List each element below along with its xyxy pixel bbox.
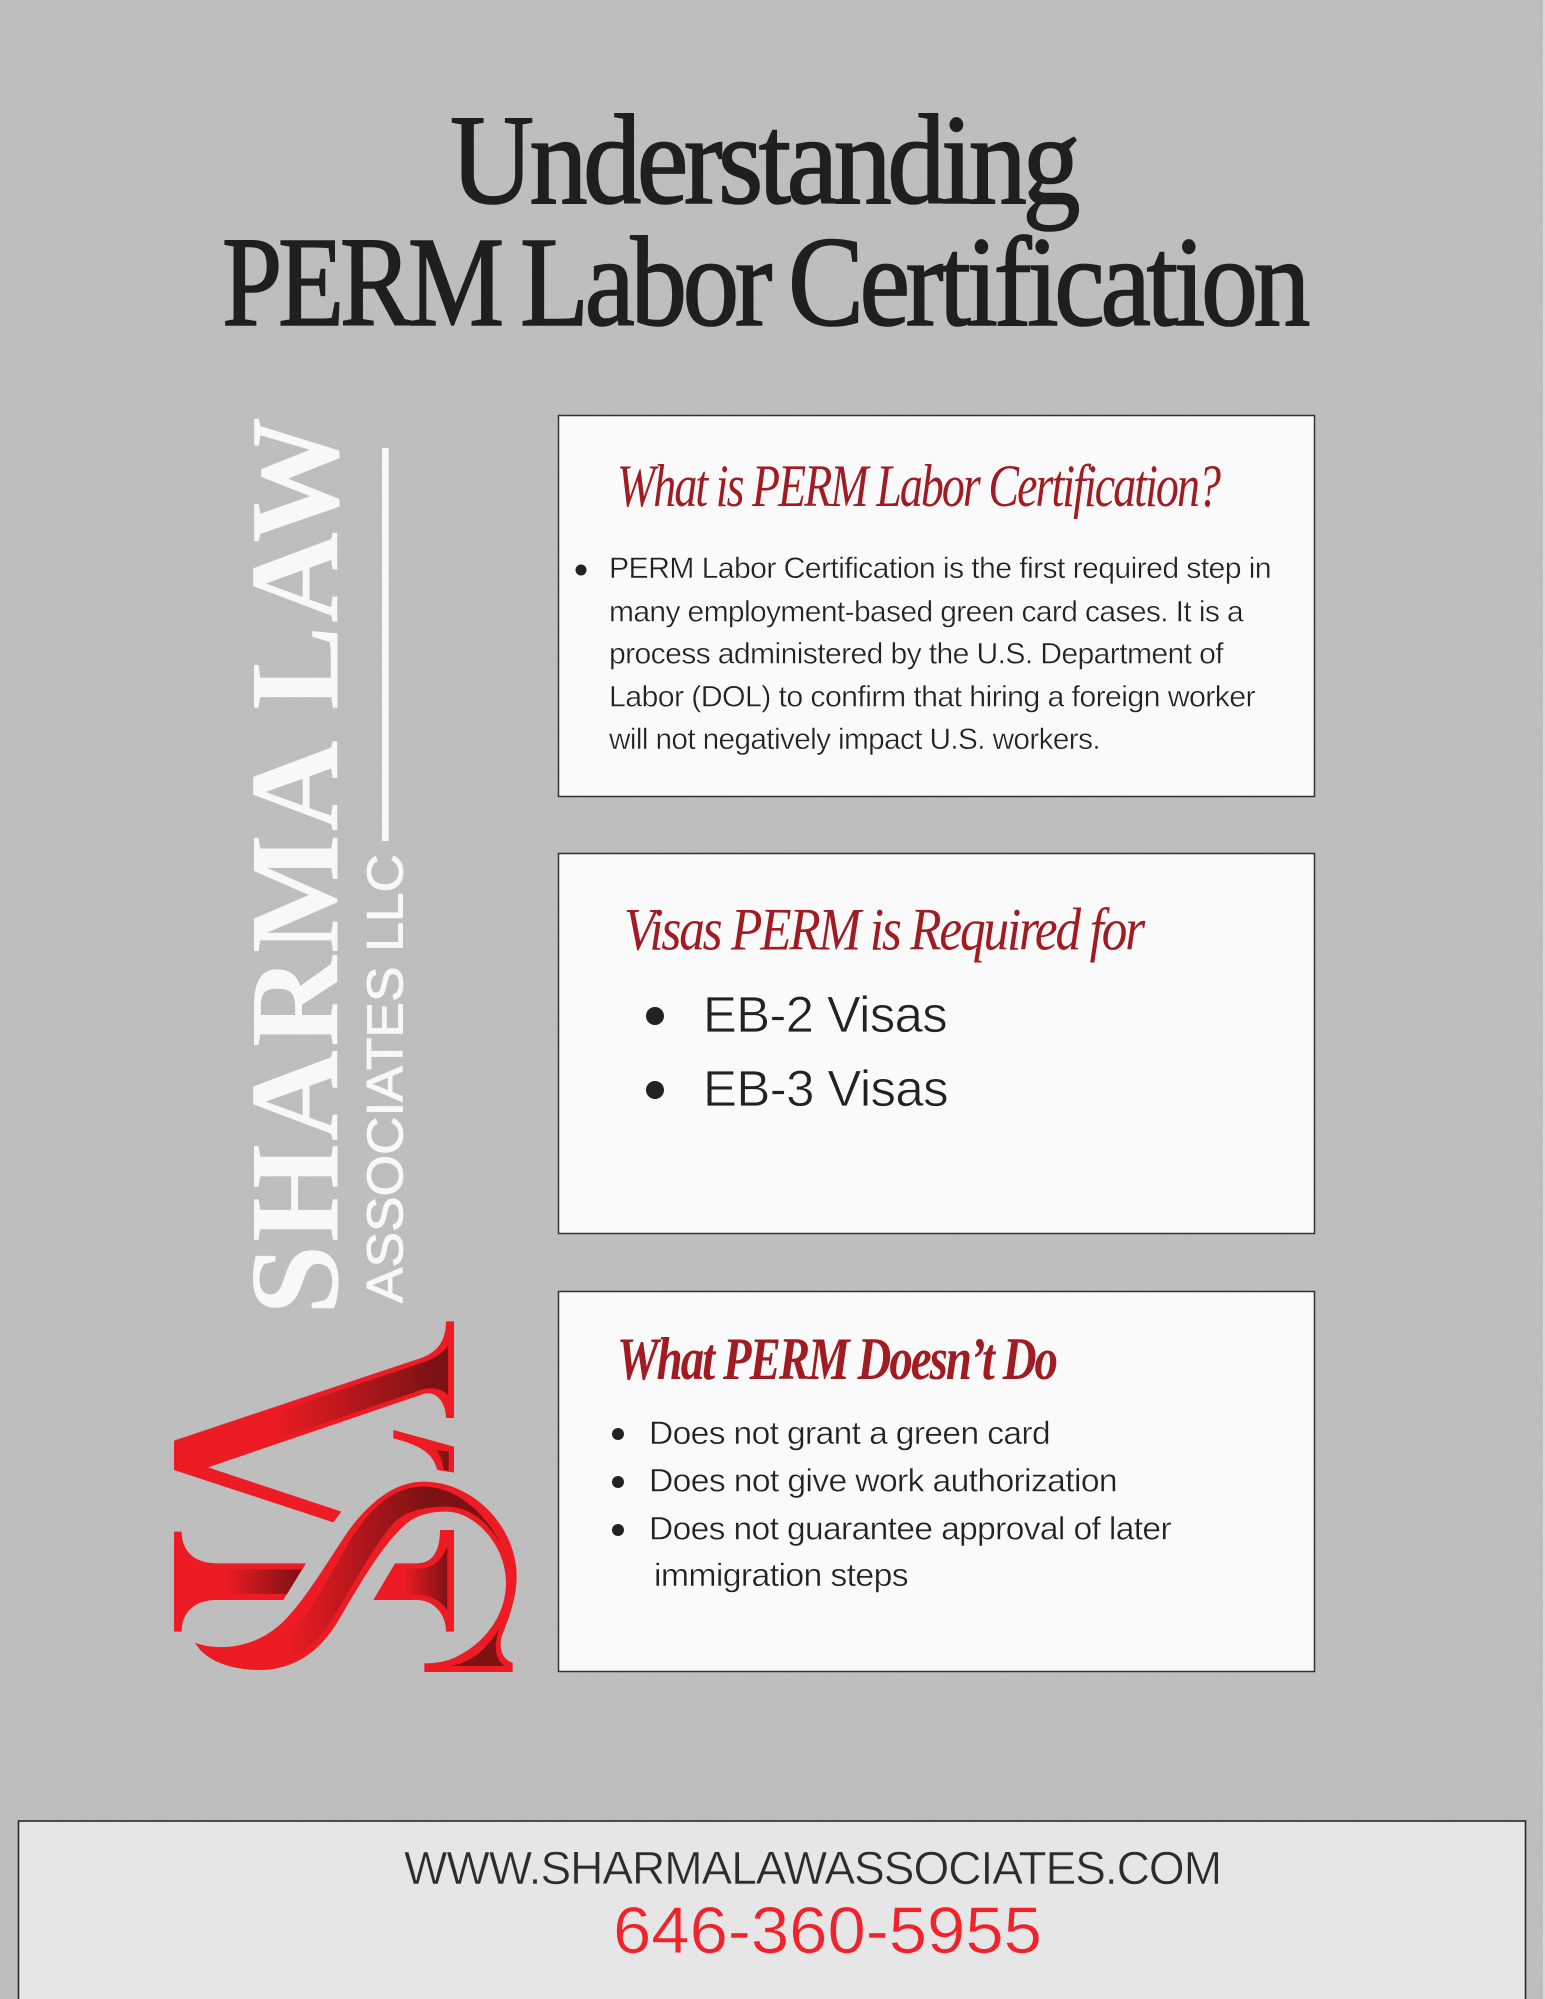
vertical white rule	[382, 448, 389, 841]
logo letter A, small serif shading	[437, 1450, 449, 1471]
logo letter A, main stroke	[174, 1321, 454, 1522]
title: Labor	[520, 211, 772, 353]
limitations list: Does not guarantee approval of later	[649, 1510, 1172, 1546]
panel: what is PERM labor certification	[558, 416, 1314, 796]
paragraph: will not negatively impact U.S. workers.	[608, 723, 1100, 756]
logo letter A, right bar	[373, 1530, 454, 1632]
limitations list: Does not give work authorization	[649, 1462, 1117, 1498]
phone number: 646-360-5955	[613, 1893, 1042, 1967]
paragraph	[608, 552, 1271, 756]
paragraph: PERM Labor Certification is the first required step in	[609, 552, 1271, 585]
logo: SA monogram	[174, 1321, 517, 1672]
bullet dot	[576, 564, 586, 576]
limitations list: Does not grant a green card	[649, 1415, 1050, 1451]
logo letter A, right bar shading	[385, 1547, 447, 1610]
logo letter S, shading	[283, 1487, 511, 1663]
title	[222, 89, 1310, 353]
logo letter S, foot shading	[450, 1628, 505, 1666]
paragraph: process administered by the U.S. Department of	[609, 638, 1224, 670]
logo letter S, outline	[195, 1482, 517, 1672]
heading: Visas PERM is Required for	[624, 896, 1146, 962]
paragraph: many employment-based green card cases. It is a	[609, 596, 1244, 628]
limitations list: immigration steps	[654, 1557, 908, 1593]
logo letter A, small serif	[393, 1430, 454, 1473]
heading: What is PERM Labor Certification?	[617, 453, 1221, 519]
visa list	[646, 986, 948, 1117]
heading: What PERM Doesn’t Do	[617, 1326, 1056, 1392]
logo letter A, left bar shading	[225, 1569, 302, 1594]
title: Certification	[788, 211, 1310, 353]
title: PERM	[222, 211, 502, 353]
logo letter A, left bar	[174, 1532, 306, 1632]
vertical firm name: Associates LLC: ASSOCIATES LLC	[356, 854, 414, 1303]
visa list: EB-3 Visas	[703, 1060, 948, 1117]
website: WWW.SHARMALAWASSOCIATES.COM	[404, 1842, 1221, 1894]
vertical firm name: Sharma Law: SHARMA LAW	[226, 414, 366, 1315]
footer contact bar	[18, 1821, 1526, 1999]
title: Understanding	[450, 89, 1079, 231]
visa list: EB-2 Visas	[703, 986, 947, 1043]
paragraph: Labor (DOL) to confirm that hiring a foreign worker	[609, 680, 1256, 714]
logo letter A, shaded stroke	[273, 1345, 448, 1441]
panel: what PERM doesn't do	[558, 1292, 1314, 1672]
limitations list	[612, 1415, 1172, 1593]
panel: visas PERM is required for	[558, 854, 1314, 1234]
